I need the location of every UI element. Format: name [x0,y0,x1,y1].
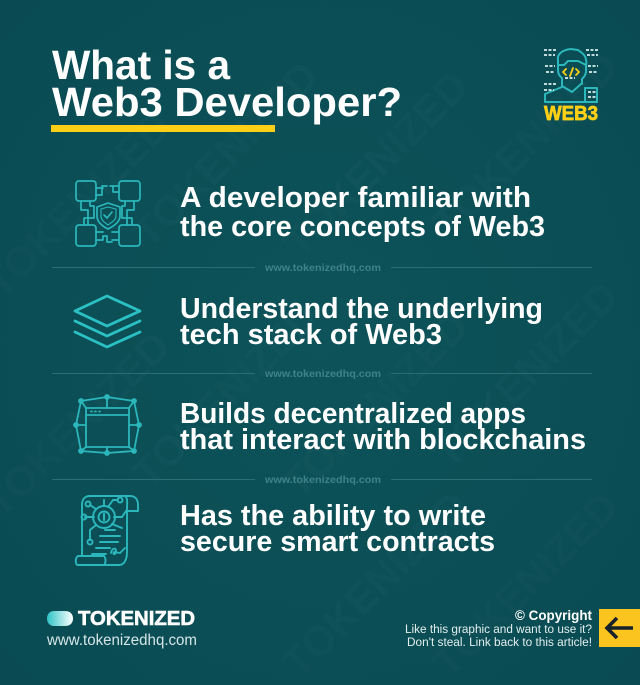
title [52,42,402,125]
background watermark: TOKENIZED [423,42,627,246]
icon: layers [75,296,140,347]
footer logo [47,608,195,630]
icon: shield network [76,181,140,246]
divider 3: www.tokenizedhq.com [264,474,381,486]
background watermark: TOKENIZED [273,302,477,506]
icon: smart contract scroll [76,496,138,565]
background watermark: TOKENIZED [423,482,627,685]
text: row 3: Builds decentralized apps [180,398,526,430]
copyright notice [405,607,592,649]
logo mark [47,611,73,626]
title: Web3 Developer? [52,79,402,125]
text: row 4 [180,500,495,558]
icon label: WEB3: WEB3 [544,103,598,125]
text: row 1 [180,182,545,243]
background watermark: TOKENIZED [123,292,327,496]
arrow button [599,609,640,647]
background watermark: TOKENIZED [123,52,327,256]
text: row 2 [180,293,543,351]
background watermark: TOKENIZED [273,62,477,266]
text: row 2: tech stack of Web3 [180,319,442,351]
divider 2: www.tokenizedhq.com [264,368,381,380]
logo wordmark: TOKENIZED [78,608,195,630]
divider 1: www.tokenizedhq.com [264,262,381,274]
text: row 4: secure smart contracts [180,526,495,558]
text: row 1: A developer familiar with [180,182,531,214]
text: row 3 [180,398,586,456]
footer website: www.tokenizedhq.com [46,632,197,649]
copyright notice: Like this graphic and want to use it? [405,622,592,636]
title underline [51,125,275,132]
copyright notice: © Copyright [515,607,592,623]
text: row 4: Has the ability to write [180,500,486,532]
title: What is a [52,42,231,88]
text: row 1: the core concepts of Web3 [180,211,545,243]
copyright notice: Don't steal. Link back to this article! [407,635,592,649]
icon: decentralized app [74,395,141,455]
background watermark: TOKENIZED [273,482,477,685]
background watermark: TOKENIZED [423,272,627,476]
text: row 3: that interact with blockchains [180,424,586,456]
icon: web3 developer [544,49,598,125]
text: row 2: Understand the underlying [180,293,543,325]
